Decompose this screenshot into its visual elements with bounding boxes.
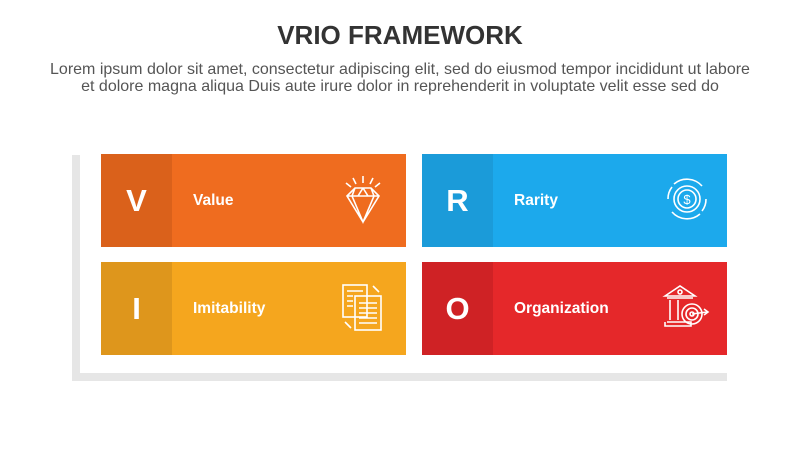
subtitle: Lorem ipsum dolor sit amet, consectetur adipiscing elit, sed do eiusmod tempor incididunt ut labore [50,61,750,78]
panel: Rarity [422,154,727,247]
panel: Imitability [101,262,406,355]
panel: Value: V [126,183,147,218]
panel: Imitability: I [132,291,141,326]
panel: Imitability: Imitability [193,300,265,317]
panel: Organization [422,262,727,355]
panel: Value: Value [193,192,234,209]
frame: grey L-shape [72,155,727,381]
icon: dollar cycle [667,178,707,220]
icon: diamond [346,176,380,224]
title: VRIO FRAMEWORK [277,20,523,50]
panel: Rarity: Rarity [514,192,558,209]
icon: dollar cycle: $ [683,192,691,207]
panel: Rarity: R [446,183,469,218]
subtitle: et dolore magna aliqua Duis aute irure dolor in reprehenderit in voluptate velit esse sed do [81,78,719,95]
icon: documents [342,284,382,331]
panel: Organization: O [445,291,470,326]
subtitle [50,61,750,95]
panel: Value [101,154,406,247]
icon: bank target [662,285,710,327]
panel: Organization: Organization [514,300,609,317]
